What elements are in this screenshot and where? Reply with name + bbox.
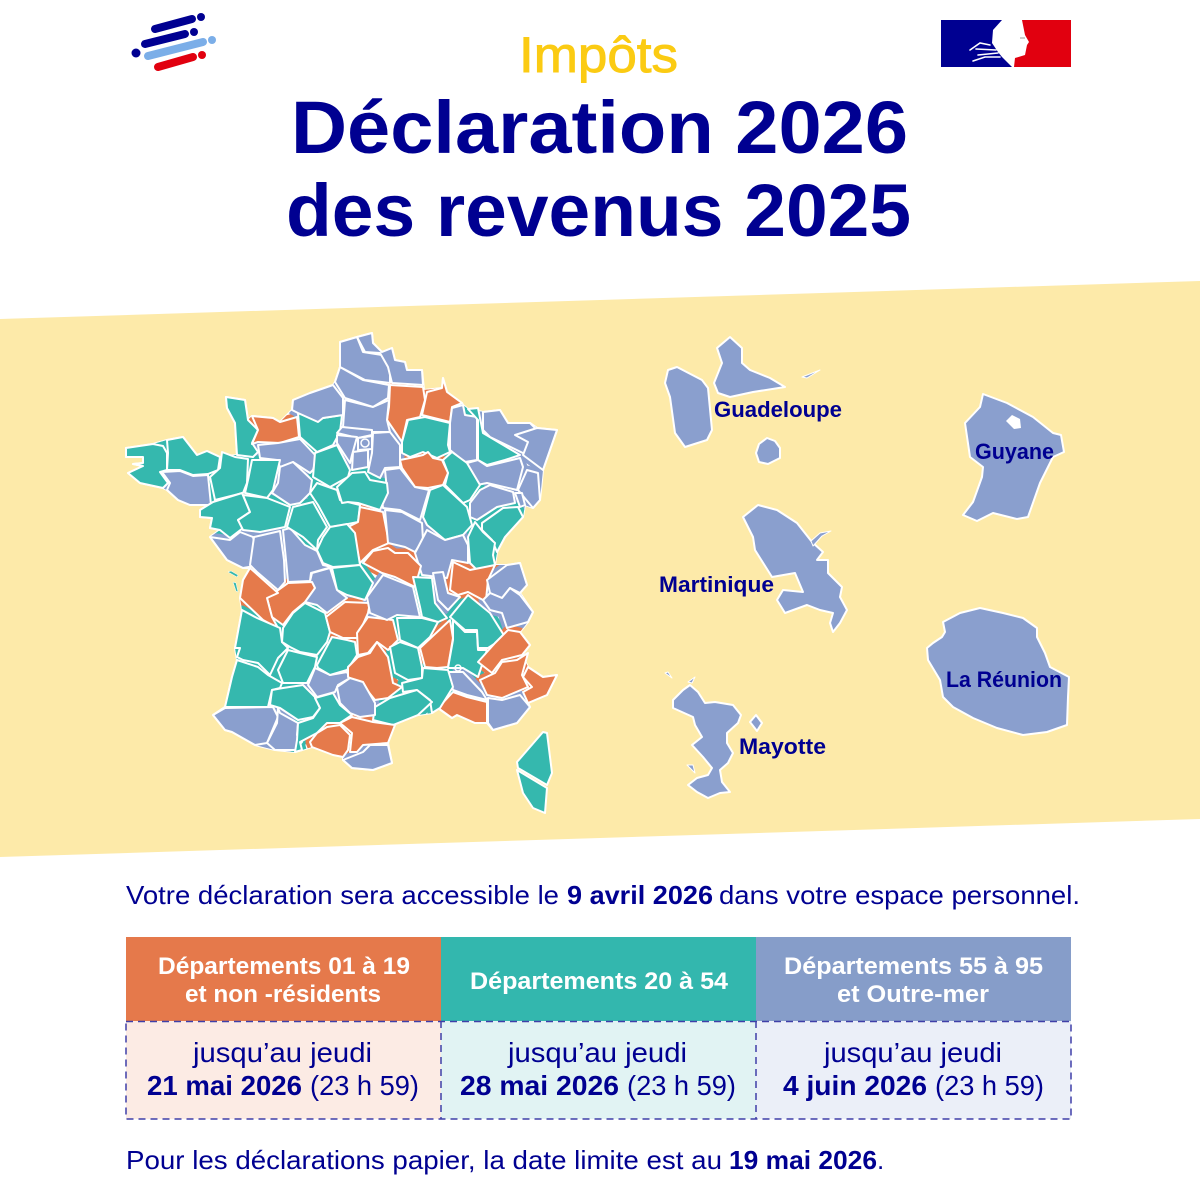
panel: yellow map band xyxy=(0,281,1200,857)
column: departments 20 to 54 xyxy=(441,937,756,1119)
text: paper deadline: Pour les déclarations papier, la date limite est au xyxy=(126,1145,722,1175)
title: Déclaration 2026 des revenus 2025 xyxy=(286,86,911,252)
territory: La Réunion xyxy=(927,608,1069,735)
label: Guyane: Guyane xyxy=(975,439,1054,464)
text: paper deadline: 19 mai 2026 xyxy=(729,1145,877,1175)
column: departments 20 to 54: (23 h 59) xyxy=(627,1070,736,1101)
label: Martinique: Martinique xyxy=(659,572,774,597)
map: overseas territories xyxy=(665,337,1069,798)
column: departments 20 to 54: Départements 20 à 54 xyxy=(470,968,729,995)
column: departments 55 to 95: (23 h 59) xyxy=(935,1070,1044,1101)
text: access date: dans votre espace personnel. xyxy=(719,880,1080,910)
label: La Réunion: La Réunion xyxy=(946,667,1062,692)
territory: Guadeloupe xyxy=(665,337,820,464)
column: departments 01 to 19: 21 mai 2026 xyxy=(147,1070,302,1101)
title: Déclaration 2026 des revenus 2025: Déclaration 2026 xyxy=(291,86,908,169)
column: departments 55 to 95 xyxy=(756,937,1071,1119)
logo: government stripes xyxy=(132,13,216,67)
map: metropolitan France departments xyxy=(126,333,557,813)
heading: Impôts: Impôts xyxy=(519,27,678,83)
text: access date xyxy=(126,880,1080,910)
label: Guadeloupe: Guadeloupe xyxy=(714,397,842,422)
column: departments 55 to 95: jusqu’au jeudi xyxy=(823,1037,1002,1068)
logo: Marianne flag xyxy=(941,20,1071,67)
label: Mayotte: Mayotte xyxy=(739,734,826,759)
column: departments 20 to 54: jusqu’au jeudi xyxy=(507,1037,687,1068)
territory: Martinique xyxy=(743,505,847,632)
column: departments 55 to 95: Départements 55 à 95 xyxy=(784,953,1043,980)
title: Déclaration 2026 des revenus 2025: des revenus 2025 xyxy=(286,169,911,252)
text: access date: 9 avril 2026 xyxy=(567,880,713,910)
table: deadlines per department group xyxy=(126,937,1071,1119)
column: departments 01 to 19: (23 h 59) xyxy=(310,1070,419,1101)
text: paper deadline: . xyxy=(877,1145,884,1175)
column: departments 01 to 19: Départements 01 à 19 xyxy=(158,953,410,980)
territory: Mayotte xyxy=(665,672,762,798)
text: access date: Votre déclaration sera accessible le xyxy=(126,880,559,910)
column: departments 01 to 19 xyxy=(126,937,441,1119)
column: departments 55 to 95: et Outre-mer xyxy=(837,981,989,1008)
territory: Guyane xyxy=(963,394,1064,521)
column: departments 01 to 19: jusqu’au jeudi xyxy=(192,1037,372,1068)
column: departments 01 to 19: et non -résidents xyxy=(185,981,381,1008)
column: departments 20 to 54: 28 mai 2026 xyxy=(460,1070,619,1101)
column: departments 55 to 95: 4 juin 2026 xyxy=(783,1070,927,1101)
